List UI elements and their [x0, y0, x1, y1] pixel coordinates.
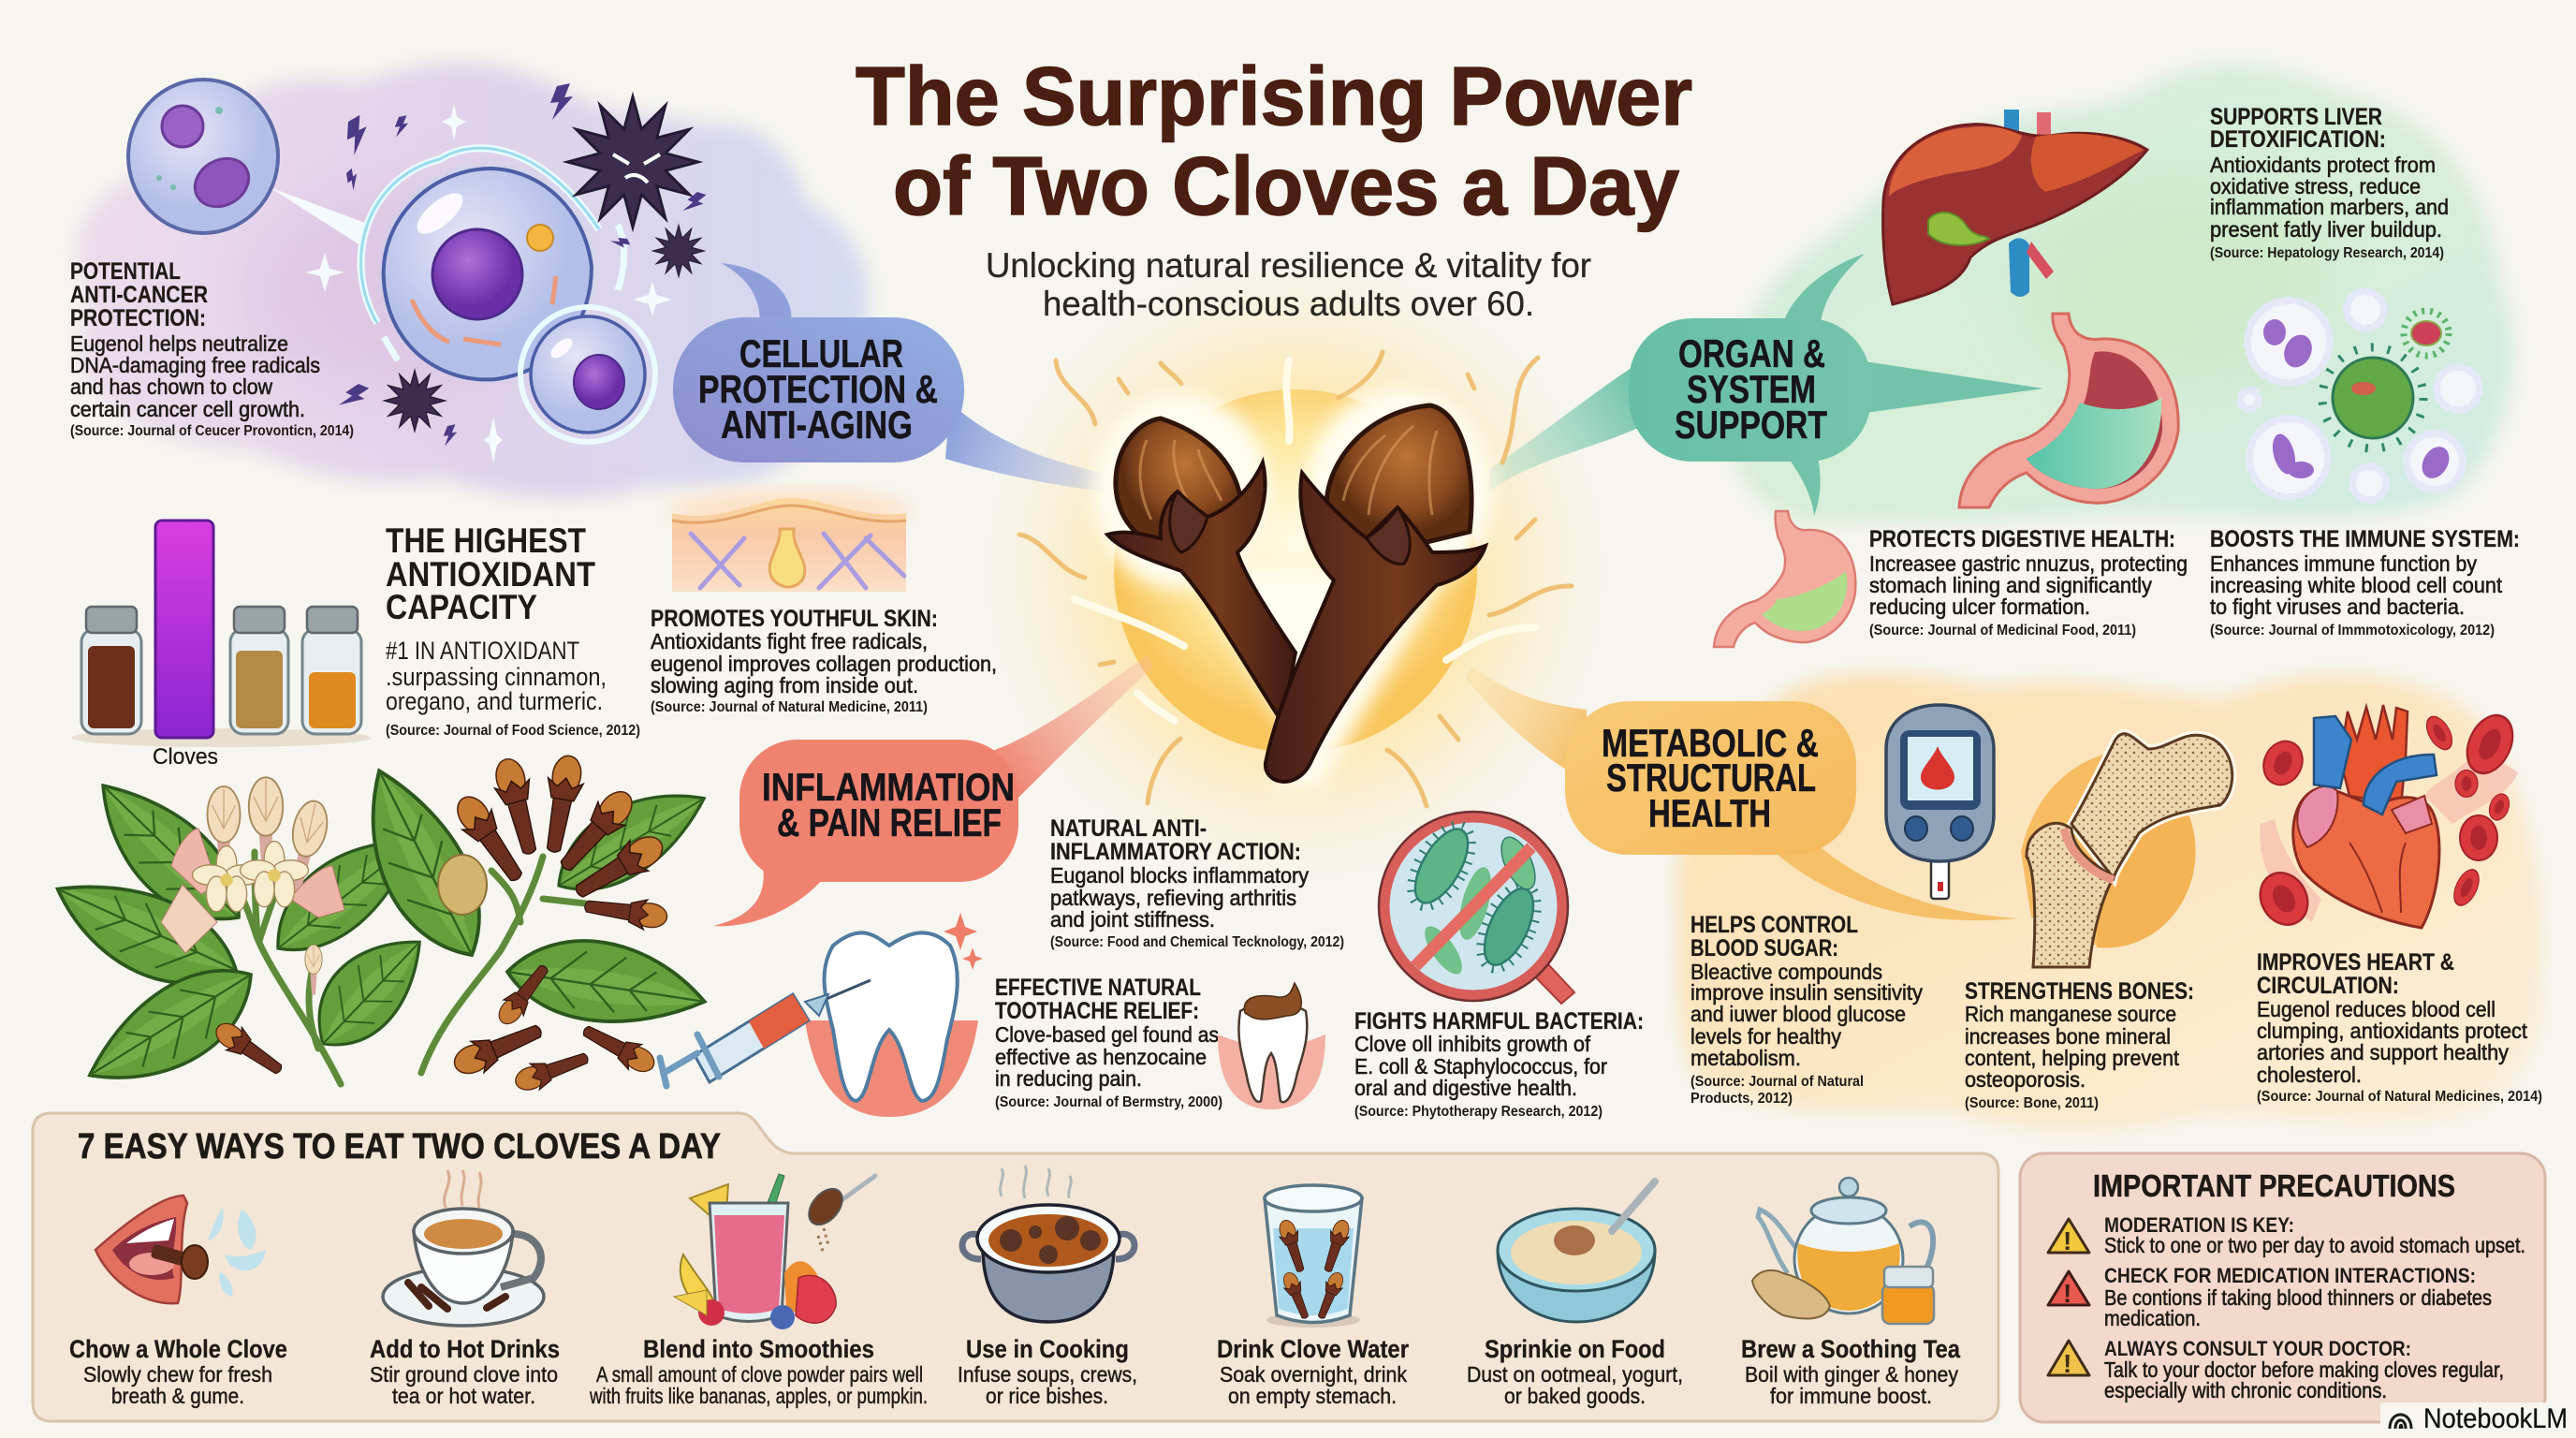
- sparkles: [944, 913, 983, 970]
- title: of Two Cloves a Day: [893, 139, 1679, 232]
- way 2: add to hot drinks: tea or hot water.: [392, 1384, 535, 1408]
- text: boosts the immune system: (Source: Journal of Immmotoxicology, 2012): [2210, 623, 2495, 638]
- text: helps control blood sugar: Bleactive compounds: [1690, 960, 1882, 984]
- illustration: clove plant branches: [40, 753, 720, 1110]
- text: promotes youthful skin: PROMOTES YOUTHFUL SKIN:: [651, 606, 938, 632]
- illustration: cells and free radicals: [128, 80, 708, 463]
- text: strengthens bones: STRENGTHENS BONES:: [1965, 978, 2194, 1005]
- text: natural anti-inflammatory action: and joint stiffness.: [1050, 907, 1215, 932]
- text: protects digestive health: [1869, 526, 2188, 638]
- text: natural anti-inflammatory action: [1050, 815, 1344, 950]
- text: effective natural toothache relief: EFFECTIVE NATURAL: [995, 975, 1201, 1001]
- text: natural anti-inflammatory action: (Source: Food and Chemical Tecknology, 2012): [1050, 934, 1344, 950]
- category bubble: metabolic and structural health: HEALTH: [1648, 791, 1771, 835]
- text: helps control blood sugar: improve insulin sensitivity: [1690, 980, 1923, 1005]
- text: potential anti-cancer protection: DNA-damaging free radicals: [70, 353, 320, 377]
- text: helps control blood sugar: levels for healthy: [1690, 1024, 1841, 1049]
- text: strengthens bones: [1965, 978, 2194, 1111]
- text: effective natural toothache relief: in reducing pain.: [995, 1066, 1142, 1091]
- way 2: add to hot drinks: Add to Hot Drinks: [370, 1335, 560, 1363]
- text: highest antioxidant capacity: oregano, and turmeric.: [386, 687, 603, 715]
- way 4: use in cooking: Infuse soups, crews,: [958, 1362, 1137, 1387]
- text: potential anti-cancer protection: certain cancer cell growth.: [70, 397, 305, 421]
- text: strengthens bones: Rich manganese source: [1965, 1002, 2176, 1026]
- bar: cloves: [155, 521, 213, 738]
- way 1: chew a whole clove: [69, 1196, 287, 1408]
- text: promotes youthful skin: eugenol improves collagen production,: [651, 652, 997, 676]
- syringe: [660, 980, 871, 1086]
- nuclei: [2263, 319, 2454, 483]
- text: supports liver detoxification: [2210, 104, 2449, 261]
- category bubble: metabolic and structural health: STRUCTURAL: [1606, 756, 1816, 800]
- way 1: chew a whole clove: breath & gume.: [111, 1384, 244, 1408]
- text: fights harmful bacteria: E. coll & Staphylococcus, for: [1354, 1054, 1607, 1078]
- category bubble: organ and system support: SYSTEM: [1687, 367, 1816, 411]
- subtitle: [986, 246, 1591, 323]
- way 3: blend into smoothies: Blend into Smoothies: [643, 1335, 874, 1363]
- text: boosts the immune system: to fight viruses and bacteria.: [2210, 594, 2465, 619]
- text: fights harmful bacteria: [1354, 1008, 1644, 1120]
- text: supports liver detoxification: Antioxidants protect from: [2210, 153, 2436, 177]
- text: strengthens bones: content, helping prevent: [1965, 1046, 2180, 1070]
- text: effective natural toothache relief: TOOTHACHE RELIEF:: [995, 998, 1199, 1024]
- free radicals: [338, 83, 708, 447]
- item: moderation: MODERATION IS KEY:: [2104, 1213, 2294, 1237]
- category bubble: metabolic and structural health: [1466, 667, 2018, 920]
- text: helps control blood sugar: and iuwer blood glucose: [1690, 1002, 1906, 1026]
- way 3: blend into smoothies: with fruits like bananas, apples, or pumpkin.: [589, 1384, 928, 1408]
- text: potential anti-cancer protection: [70, 258, 354, 439]
- item: interactions: CHECK FOR MEDICATION INTERACTIONS:: [2104, 1264, 2476, 1287]
- text: highest antioxidant capacity: #1 IN ANTIOXIDANT: [386, 637, 579, 665]
- text: fights harmful bacteria: oral and digestive health.: [1354, 1076, 1577, 1100]
- text: natural anti-inflammatory action: patkways, refieving arthritis: [1050, 886, 1296, 910]
- text: helps control blood sugar: Products, 2012): [1690, 1091, 1793, 1107]
- left cell: [128, 80, 278, 233]
- way 3: blend into smoothies: A small amount of clove powder pairs well: [596, 1362, 923, 1387]
- text: protects digestive health: reducing ulcer formation.: [1869, 594, 2090, 619]
- category bubble: inflammation and pain relief: [713, 655, 1153, 926]
- text: supports liver detoxification: inflammation marbers, and: [2210, 195, 2449, 219]
- heading: IMPORTANT PRECAUTIONS: [2093, 1168, 2455, 1203]
- text: strengthens bones: osteoporosis.: [1965, 1067, 2086, 1092]
- beam between cells: [270, 187, 370, 245]
- text: promotes youthful skin: (Source: Journal of Natural Medicine, 2011): [651, 699, 928, 715]
- text: effective natural toothache relief: [995, 975, 1222, 1110]
- text: highest antioxidant capacity: THE HIGHEST: [386, 521, 586, 560]
- item: doctor: Talk to your doctor before making cloves regular,: [2104, 1357, 2504, 1382]
- chart: antioxidant capacity jars and bar: [71, 521, 371, 770]
- watercolor wash: organ support: [1726, 66, 2512, 524]
- category bubble: organ and system support: [1488, 254, 2043, 516]
- text: effective natural toothache relief: effective as henzocaine: [995, 1045, 1207, 1069]
- text: highest antioxidant capacity: (Source: Journal of Food Science, 2012): [386, 723, 640, 739]
- text: potential anti-cancer protection: (Source: Journal of Ceucer Provonticn, 2014): [70, 423, 354, 439]
- item: moderation: [2104, 1213, 2525, 1257]
- icon: skin cross-section: [667, 490, 911, 592]
- watercolor wash: metabolic health: [1676, 673, 2542, 1130]
- loose cloves: [210, 959, 660, 1096]
- text: protects digestive health: Increasee gastric nnuzus, protecting: [1869, 551, 2188, 576]
- watermark: NotebookLM: [2380, 1402, 2576, 1438]
- text: improves heart and circulation: artories and support healthy: [2257, 1040, 2509, 1064]
- icon: tooth with clove gel: [1218, 983, 1325, 1109]
- right bud branch: [339, 753, 720, 1073]
- text: improves heart and circulation: Eugenol reduces blood cell: [2257, 997, 2496, 1021]
- text: fights harmful bacteria: (Source: Phytotherapy Research, 2012): [1354, 1104, 1603, 1120]
- text: potential anti-cancer protection: and has chown to clow: [70, 374, 272, 399]
- icon: glucose meter: [1886, 705, 1994, 899]
- white blood cells: [2240, 291, 2480, 500]
- text: helps control blood sugar: [1690, 912, 1923, 1107]
- text: improves heart and circulation: cholesterol.: [2257, 1063, 2362, 1087]
- warning icon: interactions: !: [2063, 1279, 2071, 1308]
- category bubble: organ and system support: SUPPORT: [1675, 403, 1827, 447]
- icon: bone cross-section: [2021, 734, 2232, 967]
- text: improves heart and circulation: clumping, antioxidants protect: [2257, 1019, 2528, 1043]
- text: protects digestive health: PROTECTS DIGESTIVE HEALTH:: [1869, 526, 2175, 552]
- soft halo: [1092, 389, 1493, 786]
- way 3: blend into smoothies: [589, 1174, 928, 1408]
- category bubble: metabolic and structural health: METABOLIC &: [1602, 721, 1819, 765]
- text: supports liver detoxification: present fatly liver buildup.: [2210, 217, 2442, 242]
- icon: stomach: [1959, 314, 2178, 507]
- way 5: drink clove water: Drink Clove Water: [1217, 1335, 1409, 1363]
- way 2: add to hot drinks: Stir ground clove into: [370, 1362, 558, 1387]
- text: supports liver detoxification: oxidative stress, reduce: [2210, 174, 2421, 198]
- text: strengthens bones: (Source: Bone, 2011): [1965, 1095, 2099, 1111]
- text: protects digestive health: (Source: Journal of Medicinal Food, 2011): [1869, 623, 2136, 638]
- way 7: brew a soothing tea: Brew a Soothing Tea: [1741, 1335, 1961, 1363]
- text: promotes youthful skin: Antioxidants fight free radicals,: [651, 629, 928, 653]
- illustration: immune cells: [2240, 291, 2480, 500]
- panel: important precautions: [2020, 1153, 2545, 1422]
- sparkles: [305, 103, 672, 463]
- text: boosts the immune system: [2210, 526, 2520, 638]
- small daughter cell: [520, 307, 655, 442]
- hero illustration: two cloves: [1092, 389, 1493, 786]
- watercolor wash: cellular protection: [76, 64, 868, 498]
- text: promotes youthful skin: [651, 606, 997, 715]
- warning icon: moderation: !: [2063, 1226, 2071, 1255]
- category bubble: cellular protection: PROTECTION &: [698, 367, 938, 411]
- text: promotes youthful skin: slowing aging from inside out.: [651, 673, 918, 697]
- text: potential anti-cancer protection: PROTECTION:: [70, 305, 206, 331]
- title: [856, 50, 1692, 232]
- way 1: chew a whole clove: Slowly chew for fresh: [83, 1362, 272, 1387]
- icon: small stomach: [1714, 511, 1855, 647]
- text: strengthens bones: increases bone mineral: [1965, 1024, 2171, 1049]
- text: helps control blood sugar: HELPS CONTROL: [1690, 912, 1858, 938]
- text: natural anti-inflammatory action: NATURAL ANTI-: [1050, 815, 1207, 842]
- central glow behind the cloves: [977, 253, 1614, 889]
- category bubble: inflammation and pain relief: & PAIN RELIEF: [777, 800, 1002, 844]
- virus: [2322, 311, 2449, 448]
- way 6: sprinkle on food: Sprinkie on Food: [1485, 1335, 1665, 1363]
- category bubble: cellular protection: CELLULAR: [739, 331, 903, 375]
- text: highest antioxidant capacity: .surpassing cinnamon,: [386, 663, 607, 691]
- warning icon: doctor: !: [2063, 1349, 2071, 1378]
- item: interactions: [2104, 1264, 2492, 1330]
- warning icon: interactions: [2048, 1271, 2089, 1308]
- item: doctor: especially with chronic conditions.: [2104, 1378, 2387, 1402]
- text: helps control blood sugar: metabolism.: [1690, 1046, 1801, 1070]
- text: improves heart and circulation: (Source: Journal of Natural Medicines, 2014): [2257, 1089, 2542, 1105]
- jar: turmeric: [302, 607, 361, 734]
- text: potential anti-cancer protection: Eugenol helps neutralize: [70, 331, 288, 356]
- way 7: brew a soothing tea: Boil with ginger & honey: [1745, 1362, 1958, 1387]
- way 5: drink clove water: [1217, 1185, 1409, 1408]
- category bubble: cellular protection: [673, 263, 1105, 492]
- item: doctor: [2104, 1337, 2504, 1402]
- way 4: use in cooking: or rice bishes.: [986, 1384, 1108, 1408]
- warning icon: moderation: [2048, 1219, 2089, 1255]
- main protected cell: [361, 148, 624, 379]
- way 7: brew a soothing tea: [1741, 1178, 1961, 1408]
- text: natural anti-inflammatory action: Euganol blocks inflammatory: [1050, 863, 1309, 888]
- way 4: use in cooking: Use in Cooking: [966, 1335, 1129, 1363]
- text: natural anti-inflammatory action: INFLAMMATORY ACTION:: [1050, 839, 1301, 865]
- text: supports liver detoxification: DETOXIFICATION:: [2210, 126, 2386, 153]
- text: potential anti-cancer protection: POTENTIAL: [70, 258, 181, 285]
- icon: magnifier with crossed-out bacteria: [1379, 812, 1574, 1004]
- left clove stem and head: [1107, 418, 1295, 723]
- category bubble: organ and system support: ORGAN &: [1678, 331, 1825, 375]
- title: The Surprising Power: [856, 50, 1692, 142]
- icon: liver: [1883, 110, 2147, 304]
- text: highest antioxidant capacity: [386, 521, 640, 739]
- text: fights harmful bacteria: FIGHTS HARMFUL BACTERIA:: [1354, 1008, 1644, 1034]
- category bubble: cellular protection: ANTI-AGING: [721, 403, 913, 447]
- way 6: sprinkle on food: or baked goods.: [1504, 1384, 1646, 1408]
- text: potential anti-cancer protection: ANTI-CANCER: [70, 282, 208, 308]
- text: boosts the immune system: Enhances immune function by: [2210, 551, 2477, 576]
- subtitle: health-conscious adults over 60.: [1043, 285, 1534, 323]
- way 5: drink clove water: on empty stemach.: [1228, 1384, 1397, 1408]
- way 2: add to hot drinks: [370, 1170, 560, 1408]
- text: improves heart and circulation: [2257, 949, 2542, 1105]
- text: effective natural toothache relief: Clove-based gel found as: [995, 1022, 1219, 1047]
- way 7: brew a soothing tea: for immune boost.: [1770, 1384, 1932, 1408]
- icon: tooth with syringe: [660, 913, 983, 1117]
- text: highest antioxidant capacity: ANTIOXIDANT: [386, 555, 595, 594]
- way 1: chew a whole clove: Chow a Whole Clove: [69, 1335, 287, 1363]
- left flowering branch: [40, 762, 443, 1110]
- jar: cinnamon: [230, 607, 288, 734]
- category bubble: inflammation and pain relief: INFLAMMATION: [762, 765, 1015, 809]
- text: helps control blood sugar: (Source: Journal of Natural: [1690, 1074, 1864, 1090]
- text: supports liver detoxification: (Source: Hepatology Research, 2014): [2210, 245, 2444, 261]
- text: boosts the immune system: increasing white blood cell count: [2210, 573, 2503, 597]
- text: protects digestive health: stomach lining and significantly: [1869, 573, 2152, 597]
- warning icon: doctor: [2048, 1341, 2089, 1378]
- panel heading: 7 EASY WAYS TO EAT TWO CLOVES A DAY: [78, 1127, 721, 1167]
- text: improves heart and circulation: CIRCULATION:: [2257, 973, 2399, 999]
- item: doctor: ALWAYS CONSULT YOUR DOCTOR:: [2104, 1337, 2411, 1360]
- text: supports liver detoxification: SUPPORTS LIVER: [2210, 104, 2382, 130]
- text: improves heart and circulation: IMPROVES HEART &: [2257, 949, 2454, 976]
- way 6: sprinkle on food: [1467, 1181, 1683, 1408]
- energy rays around the cloves: [1019, 352, 1572, 806]
- subtitle: Unlocking natural resilience & vitality for: [986, 246, 1591, 285]
- chart: antioxidant capacity jars and bar: Cloves: [153, 744, 218, 770]
- text: highest antioxidant capacity: CAPACITY: [386, 588, 537, 626]
- right clove stem and head: [1266, 405, 1486, 782]
- item: interactions: medication.: [2104, 1306, 2201, 1330]
- text: fights harmful bacteria: Clove oll inhibits growth of: [1354, 1032, 1591, 1056]
- panel: 7 easy ways: [33, 1113, 1998, 1421]
- way 5: drink clove water: Soak overnight, drink: [1220, 1362, 1407, 1387]
- text: effective natural toothache relief: (Source: Journal of Bermstry, 2000): [995, 1094, 1222, 1110]
- text: boosts the immune system: BOOSTS THE IMMUNE SYSTEM:: [2210, 526, 2520, 552]
- item: interactions: Be contions if taking blood thinners or diabetes: [2104, 1285, 2492, 1310]
- text: helps control blood sugar: BLOOD SUGAR:: [1690, 935, 1838, 961]
- jar: first spice: [81, 607, 141, 734]
- way 4: use in cooking: [958, 1166, 1137, 1408]
- way 6: sprinkle on food: Dust on ootmeal, yogurt,: [1467, 1362, 1683, 1387]
- icon: heart with blood cells: [2251, 705, 2522, 933]
